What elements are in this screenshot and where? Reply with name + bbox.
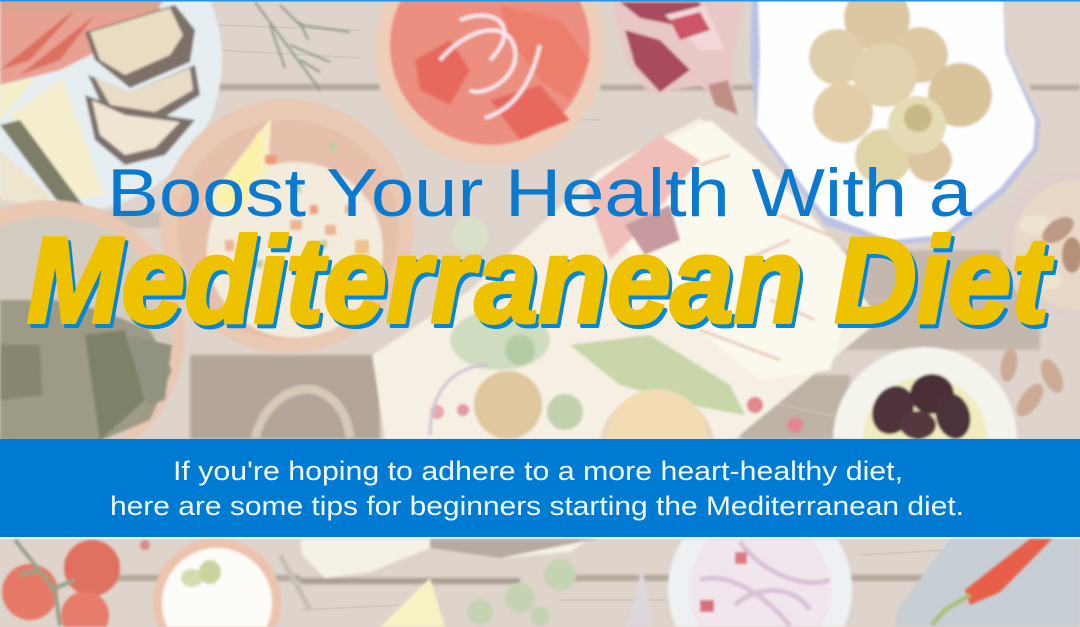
food: falafel plate	[750, 0, 1040, 245]
food: rice tabbouleh bowl	[160, 99, 414, 353]
food: grey napkin	[895, 539, 1080, 627]
food: flatbread bottom	[300, 539, 600, 578]
food: olives plate	[833, 347, 1017, 443]
banner: blue subtitle strip	[0, 439, 1080, 539]
title: Boost Your Health With a: Boost Your Health With a	[107, 155, 972, 231]
subtitle line 2: here are some tips for beginners starting the Mediterranean diet.	[110, 491, 964, 521]
food: yogurt dip bowl	[153, 539, 281, 627]
food: onion slice	[625, 566, 652, 627]
food: red chili pepper	[932, 539, 1052, 625]
food: flatbread on cutting board	[372, 118, 880, 439]
food: almonds	[998, 347, 1068, 421]
food: rope handle	[255, 389, 350, 438]
food: rosemary sprig	[255, 2, 350, 90]
subtitle line 1: If you're hoping to adhere to a more heart-healthy diet,	[173, 456, 903, 486]
top border line	[0, 0, 1080, 2]
food: lemon wedge bottom	[380, 578, 445, 627]
food: hummus glass bowl	[600, 389, 803, 439]
food: fried falafel on board	[430, 365, 542, 439]
food: nuts bowl	[1000, 170, 1080, 320]
food: herb greens bottom	[280, 555, 576, 626]
food: stuffed grape leaves bowl	[0, 200, 185, 470]
food: grilled vegetables plate	[0, 0, 222, 218]
food: salad greens	[450, 217, 745, 430]
food: red onion plate	[668, 539, 852, 627]
food: pomegranate	[612, 0, 745, 115]
food: cherry tomatoes	[2, 540, 150, 627]
food: tomato salad bowl	[375, 0, 605, 165]
